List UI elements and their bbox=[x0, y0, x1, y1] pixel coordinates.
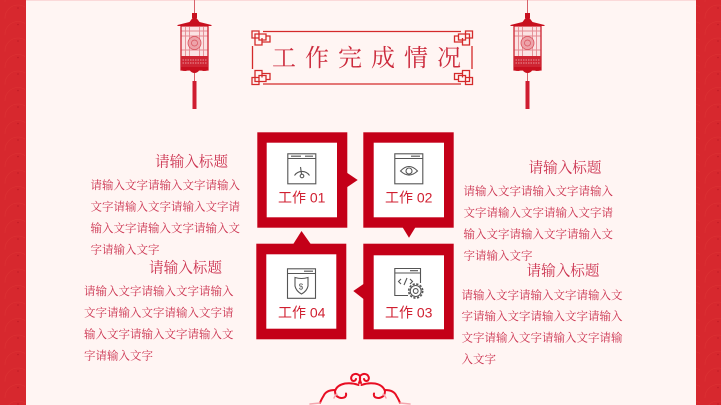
text block: right top: 请输入标题 bbox=[528, 158, 602, 176]
panel: left red side bar bbox=[0, 0, 26, 405]
text block: right top bbox=[464, 158, 613, 262]
text block: left bottom: 字请输入文字 bbox=[84, 348, 153, 362]
text block: left top: 输入文字请输入文字请输入文 bbox=[90, 221, 240, 235]
panel: work 03 bbox=[363, 244, 454, 339]
icon: code window with gear bbox=[395, 268, 423, 298]
text block: left bottom: 输入文字请输入文字请输入文 bbox=[84, 327, 234, 341]
panel: work 01 bbox=[257, 132, 347, 228]
label: 工作 04 bbox=[278, 304, 326, 320]
text block: left top bbox=[90, 152, 240, 256]
label: 工作 03 bbox=[385, 304, 433, 320]
text block: left top: 请输入文字请输入文字请输入 bbox=[90, 178, 240, 192]
text block: right top: 文字请输入文字请输入文字请 bbox=[464, 206, 613, 220]
icon: dollar shield window bbox=[288, 269, 316, 298]
icon: left hanging lantern bbox=[178, 0, 212, 109]
text block: right bottom bbox=[462, 262, 623, 366]
title: 工作完成情况 bbox=[272, 45, 470, 72]
text block: left bottom: 请输入标题 bbox=[149, 258, 222, 276]
text block: right top: 请输入文字请输入文字请输入 bbox=[464, 184, 613, 198]
text block: left bottom: 请输入文字请输入文字请输入 bbox=[84, 284, 234, 298]
text block: right bottom: 入文字 bbox=[462, 352, 496, 366]
panel: right red side bar bbox=[696, 0, 721, 405]
text block: right bottom: 文字请输入文字请输入文字请输 bbox=[462, 330, 623, 344]
icon: gauge window bbox=[288, 154, 316, 184]
text block: left bottom bbox=[84, 258, 234, 362]
label: 工作 02 bbox=[385, 190, 433, 206]
text block: left bottom: 文字请输入文字请输入文字请 bbox=[84, 306, 234, 320]
arrow: 01 to 02 bbox=[347, 173, 358, 187]
panel: work 04: $ bbox=[299, 282, 304, 292]
panel: work 02 bbox=[363, 132, 454, 228]
text block: right top: 输入文字请输入文字请输入文 bbox=[464, 227, 613, 241]
text block: left top: 请输入标题 bbox=[155, 152, 228, 170]
arrow: 02 to 03 bbox=[403, 228, 415, 238]
arrow: 04 to 01 bbox=[293, 231, 311, 244]
text block: right bottom: 请输入文字请输入文字请输入文 bbox=[462, 288, 623, 302]
ornament: bottom cloud scroll bbox=[310, 374, 410, 404]
icon: right hanging lantern bbox=[510, 0, 544, 109]
text block: right top: 字请输入文字 bbox=[464, 248, 533, 262]
text block: right bottom: 字请输入文字请输入文字请输入 bbox=[462, 309, 623, 323]
text block: right bottom: 请输入标题 bbox=[526, 262, 600, 280]
icon: eye window bbox=[395, 154, 423, 184]
label: 工作 01 bbox=[278, 190, 326, 206]
text block: left top: 文字请输入文字请输入文字请 bbox=[90, 200, 240, 214]
text block: left top: 字请输入文字 bbox=[90, 242, 160, 256]
title frame bbox=[252, 31, 472, 84]
panel: work 04 bbox=[256, 244, 346, 339]
top edge strip bbox=[0, 0, 721, 1]
arrow: 03 to 04 bbox=[353, 284, 364, 299]
